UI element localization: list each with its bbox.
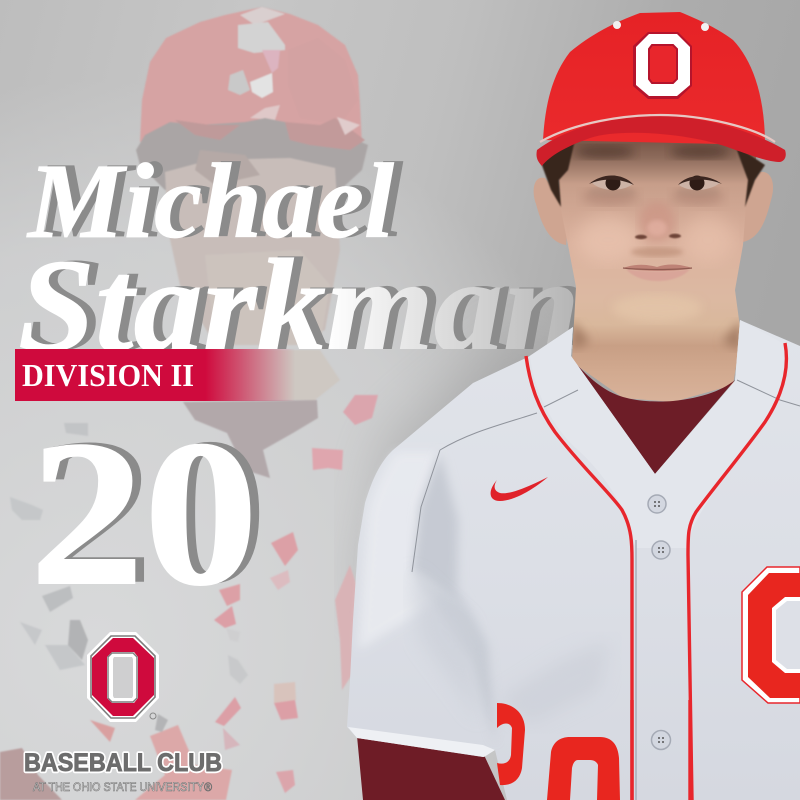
nostrils [635, 234, 681, 239]
mouth [623, 264, 692, 281]
division banner: DIVISION II [22, 357, 194, 393]
ball cap [537, 12, 786, 166]
jersey number: 20 [30, 398, 258, 628]
jersey lettering detail [497, 703, 620, 800]
player photo illustration [347, 12, 800, 800]
mosaic silhouette of player [0, 7, 378, 800]
chest block O [742, 567, 800, 703]
club wordmark [24, 749, 222, 794]
last name: Starkman [20, 256, 576, 349]
undershirt sleeve [357, 736, 505, 800]
jersey collar [530, 320, 787, 548]
club wordmark: BASEBALL CLUB [24, 749, 222, 777]
first name: Michael: Michael [26, 143, 394, 261]
cap block O [633, 32, 692, 99]
club wordmark: AT THE OHIO STATE UNIVERSITY® [33, 780, 212, 794]
red piping [526, 356, 632, 800]
face and neck [556, 130, 762, 402]
logo: block O [87, 632, 159, 722]
hair [540, 140, 765, 207]
eyes [588, 176, 722, 197]
last name: Starkman: Starkman [27, 230, 589, 378]
buttons [648, 495, 670, 750]
club wordmark: BASEBALL CLUB [24, 749, 222, 777]
division banner [15, 349, 295, 401]
first name: Michael: Michael [35, 142, 403, 260]
ears [534, 172, 773, 245]
maroon undershirt [571, 358, 735, 474]
jersey body [347, 320, 800, 800]
jersey number: 20 [39, 396, 267, 626]
last name: Starkman: Starkman [18, 231, 580, 379]
swoosh [491, 477, 548, 501]
